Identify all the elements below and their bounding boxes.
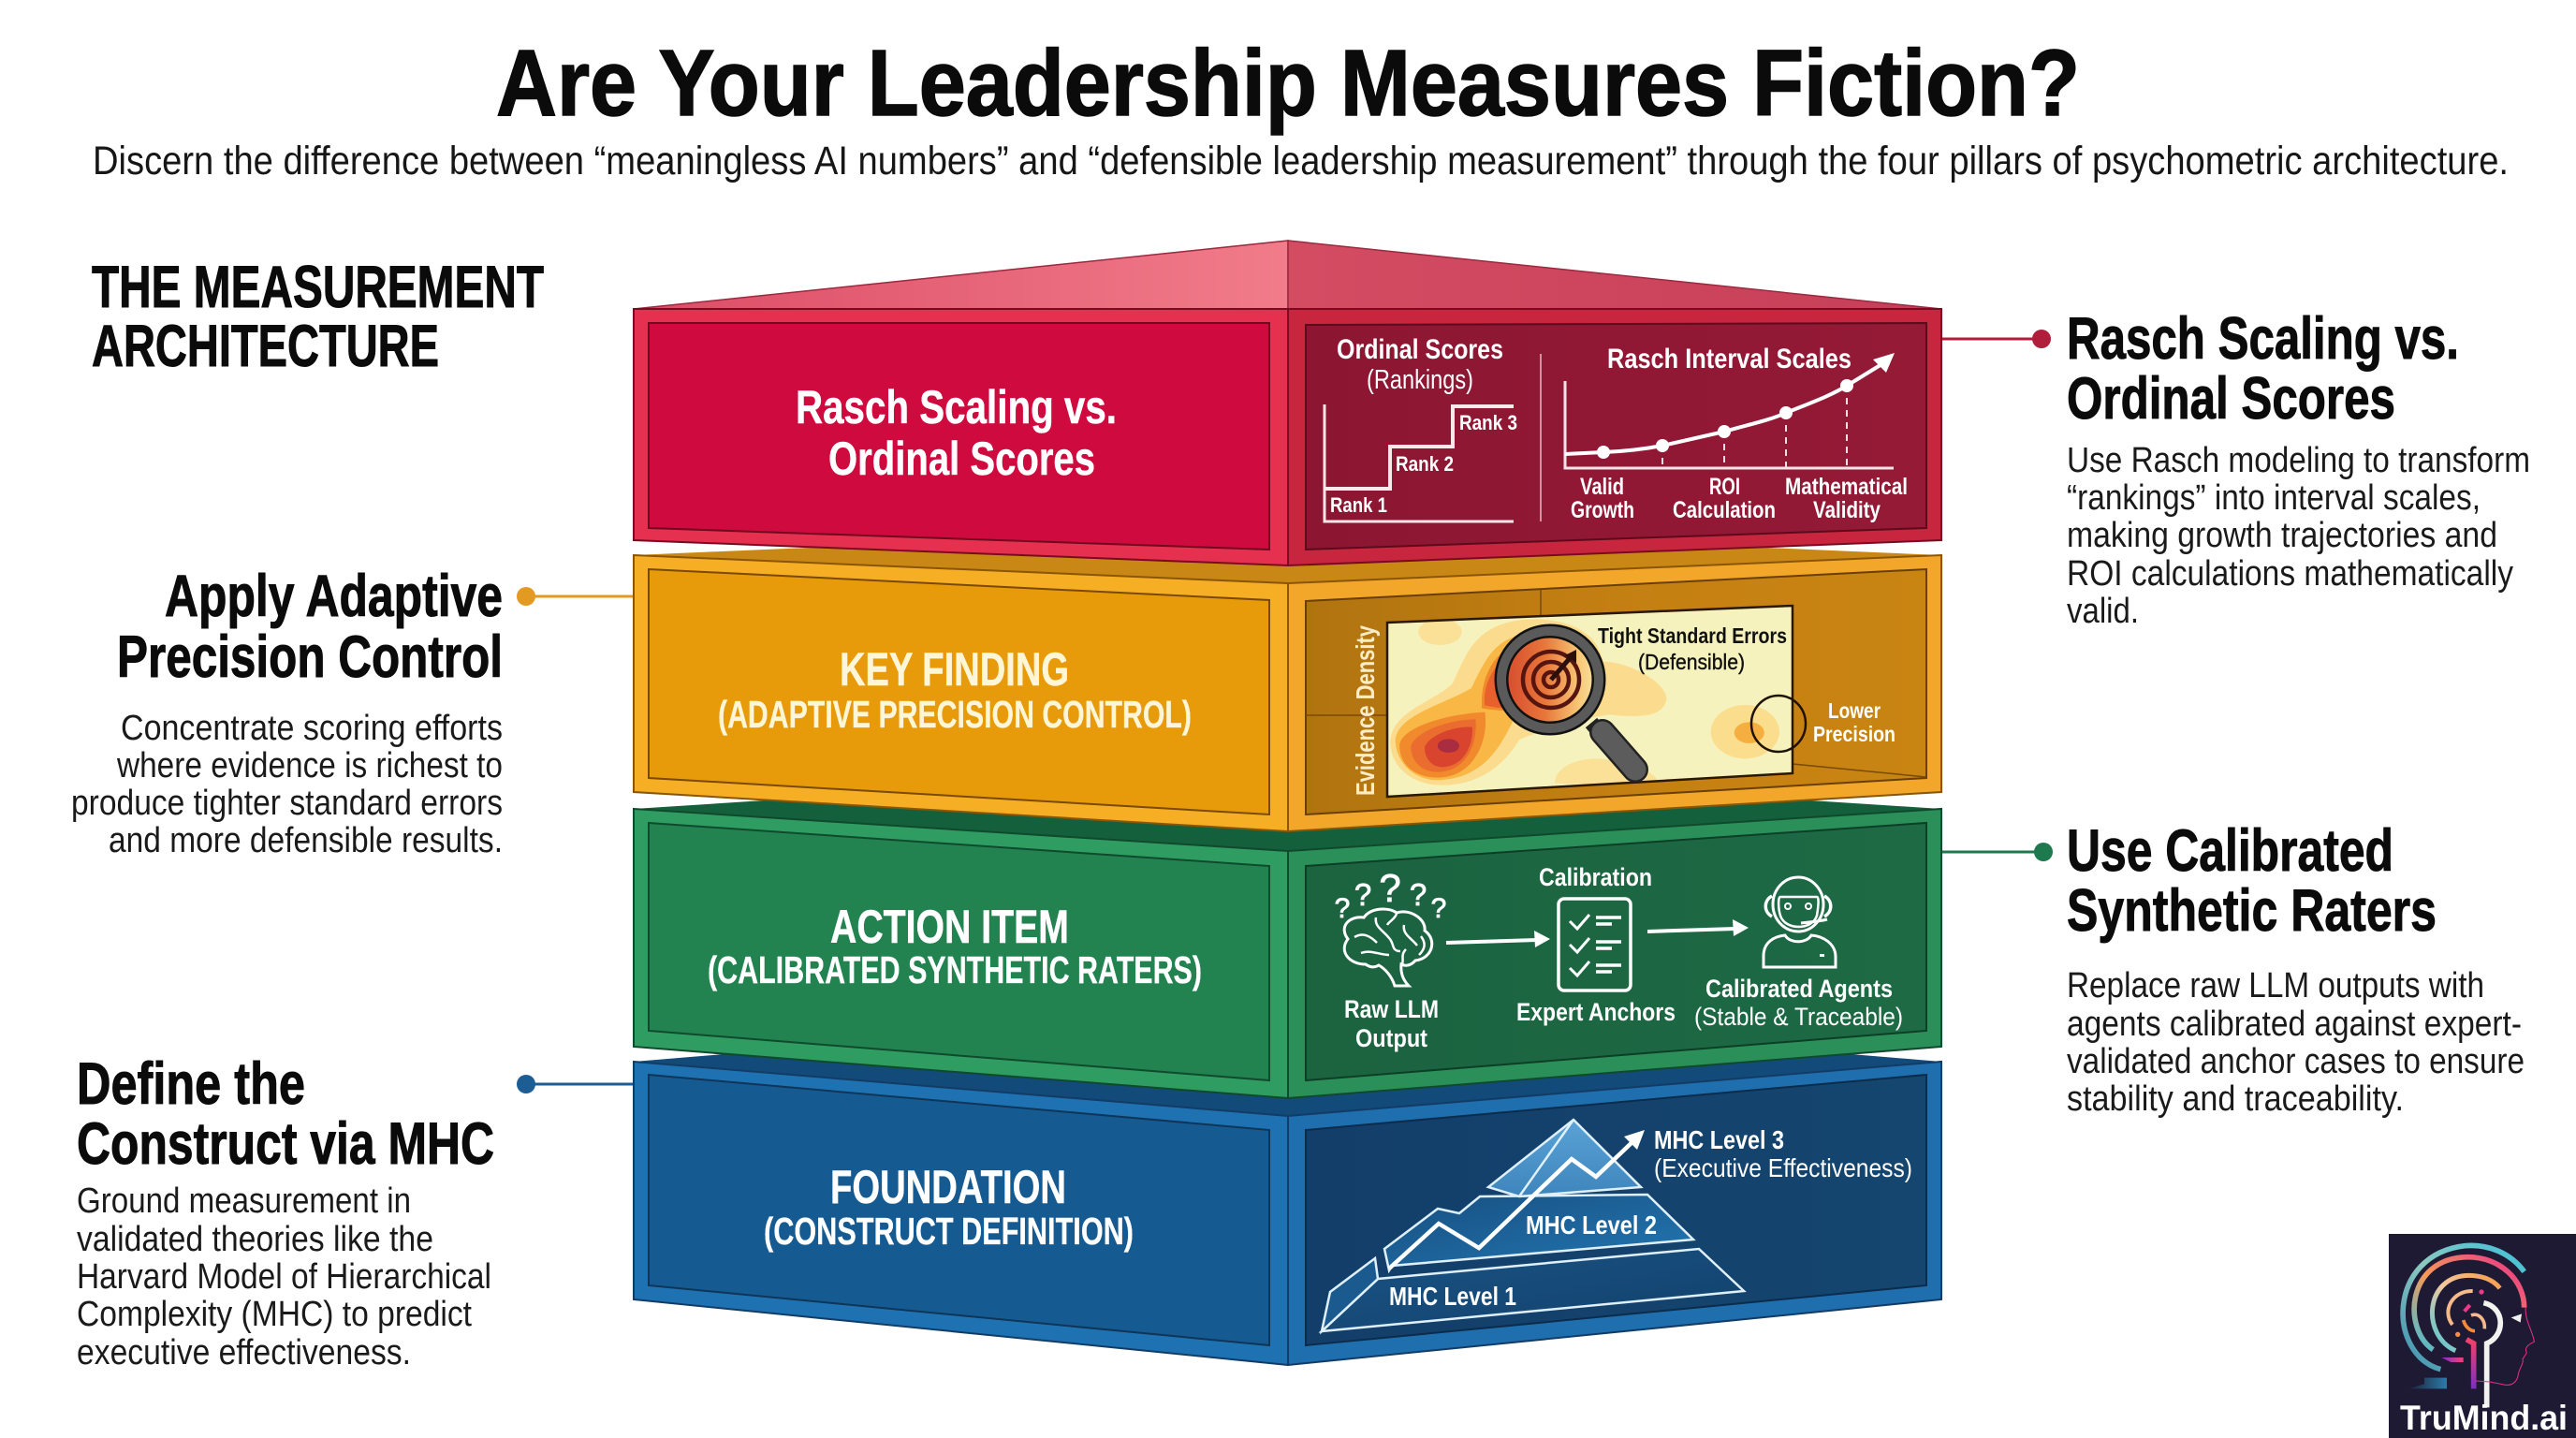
text block: calibrated synthetic raters: stability and traceability.	[2067, 1079, 2404, 1119]
connector: blue callout	[517, 1075, 637, 1093]
section heading: the measurement architecture	[92, 255, 544, 379]
logo: TruMind.ai	[2389, 1234, 2576, 1438]
text block: calibrated synthetic raters: validated anchor cases to ensure	[2067, 1042, 2525, 1081]
connector: orange callout	[517, 587, 637, 606]
arrow: brain to checklist	[1446, 931, 1550, 947]
text block: rasch scaling: valid.	[2067, 592, 2139, 631]
diagram: calibration flow: (Stable & Traceable)	[1694, 1003, 1903, 1031]
label: foundation: FOUNDATION	[830, 1161, 1066, 1213]
icon: brain with question marks: ?	[1379, 866, 1401, 910]
panel: rasch scaling block	[634, 241, 1941, 565]
arrow: growth zigzag	[1389, 1130, 1645, 1269]
text block: adaptive precision control: produce tighter standard errors	[71, 784, 503, 823]
text block: construct via MHC: Harvard Model of Hierarchical	[77, 1257, 491, 1297]
label: foundation	[764, 1161, 1134, 1253]
text block: rasch scaling: Ordinal Scores	[2067, 366, 2395, 432]
connector: red callout	[1938, 330, 2051, 348]
icon: brain with question marks: ?	[1410, 877, 1427, 912]
panel: key finding block: Precision	[1813, 722, 1895, 746]
text block: rasch scaling: ROI calculations mathematically	[2067, 554, 2513, 594]
diagram: calibration flow: Calibrated Agents	[1705, 975, 1893, 1003]
text block: calibrated synthetic raters	[2067, 818, 2525, 1119]
text block: rasch scaling: “rankings” into interval scales,	[2067, 478, 2481, 518]
text block: construct via MHC: Define the	[77, 1051, 305, 1117]
chart: ordinal step scale: Ordinal Scores	[1337, 334, 1503, 365]
text block: construct via MHC: Ground measurement in	[77, 1181, 411, 1221]
arrow: checklist to agent	[1647, 919, 1749, 936]
chart: MHC pyramid: MHC Level 3	[1654, 1125, 1784, 1154]
callout: lower precision circle	[1751, 696, 1806, 752]
text block: calibrated synthetic raters: Synthetic Raters	[2067, 878, 2437, 944]
chart: rasch interval curve: Rasch Interval Scales	[1607, 344, 1852, 374]
section heading: the measurement architecture: THE MEASUREMENT	[92, 255, 544, 320]
text block: construct via MHC: validated theories like the	[77, 1220, 433, 1259]
diagram: calibration flow	[1335, 863, 1903, 1052]
chart: evidence heatmap	[1387, 606, 1806, 797]
icon: brain with question marks: ?	[1431, 893, 1446, 924]
text block: adaptive precision control: and more defensible results.	[109, 821, 503, 860]
icon: calibrated agent	[1764, 877, 1836, 967]
text block: calibrated synthetic raters: agents calibrated against expert-	[2067, 1005, 2522, 1044]
icon: brain with question marks: ?	[1354, 877, 1371, 912]
text block: rasch scaling: Rasch Scaling vs.	[2067, 306, 2459, 372]
text block: calibrated synthetic raters: Replace raw LLM outputs with	[2067, 966, 2484, 1005]
text block: construct via MHC: executive effectiveness.	[77, 1333, 411, 1372]
chart: MHC pyramid	[1322, 1120, 1912, 1331]
label: foundation: (CONSTRUCT DEFINITION)	[764, 1210, 1134, 1253]
text block: construct via MHC: Construct via MHC	[77, 1111, 494, 1177]
chart: evidence heatmap: Tight Standard Errors	[1598, 624, 1787, 648]
diagram: calibration flow: Raw LLM	[1344, 995, 1439, 1023]
label: key finding	[718, 643, 1192, 736]
chart: rasch interval curve	[1565, 344, 1908, 523]
text block: adaptive precision control	[71, 564, 503, 860]
chart: rasch interval curve: Validity	[1813, 497, 1881, 523]
chart: MHC pyramid: MHC Level 1	[1389, 1282, 1516, 1311]
chart: ordinal step scale: Rank 2	[1396, 452, 1454, 476]
icon: brain with question marks	[1335, 866, 1446, 986]
logo: TruMind.ai: TruMind.ai	[2400, 1399, 2568, 1437]
chart: ordinal step scale: Rank 3	[1459, 411, 1517, 434]
chart: ordinal step scale: (Rankings)	[1367, 365, 1473, 395]
text block: construct via MHC	[77, 1051, 494, 1372]
label: rasch scaling	[796, 381, 1117, 485]
text block: rasch scaling: making growth trajectories and	[2067, 516, 2497, 555]
text block: adaptive precision control: where evidence is richest to	[116, 746, 503, 785]
label: action item: (CALIBRATED SYNTHETIC RATERS)	[708, 948, 1202, 991]
text block: adaptive precision control: Concentrate scoring efforts	[121, 709, 503, 748]
chart: MHC pyramid: (Executive Effectiveness)	[1654, 1153, 1912, 1182]
icon: brain with question marks: ?	[1335, 893, 1350, 924]
chart: MHC pyramid: MHC Level 2	[1526, 1211, 1657, 1240]
text block: construct via MHC: Complexity (MHC) to predict	[77, 1295, 472, 1334]
label: action item: ACTION ITEM	[830, 901, 1069, 953]
connector: green callout	[1938, 843, 2053, 861]
chart: ordinal step scale	[1325, 334, 1517, 521]
chart: rasch interval curve: ROI	[1709, 474, 1740, 500]
chart: rasch interval curve: Mathematical	[1785, 474, 1908, 500]
label: rasch scaling: Ordinal Scores	[828, 433, 1095, 485]
label: key finding: KEY FINDING	[840, 643, 1069, 696]
panel: key finding block: Lower	[1828, 698, 1881, 723]
panel: key finding block	[634, 527, 1941, 831]
panel: action item block	[634, 767, 1941, 1098]
label: key finding: (ADAPTIVE PRECISION CONTROL)	[718, 693, 1192, 736]
chart: ordinal step scale: Rank 1	[1330, 493, 1387, 517]
icon: checklist	[1559, 899, 1631, 990]
text block: adaptive precision control: Precision Control	[117, 624, 503, 690]
panel: foundation block	[634, 1007, 1941, 1365]
label: action item	[708, 901, 1202, 991]
diagram: calibration flow: Output	[1355, 1024, 1427, 1052]
chart: rasch interval curve: Valid	[1580, 474, 1624, 500]
text block: rasch scaling	[2067, 306, 2530, 631]
vertical label: evidence density: Evidence Density	[1351, 625, 1380, 796]
diagram: calibration flow: Calibration	[1539, 863, 1652, 891]
section heading: the measurement architecture: ARCHITECTURE	[92, 314, 439, 379]
title: Are Your Leadership Measures Fiction?	[496, 31, 2080, 136]
chart: evidence heatmap: (Defensible)	[1638, 650, 1745, 674]
label: rasch scaling: Rasch Scaling vs.	[796, 381, 1117, 433]
icon: magnifier with target	[1501, 631, 1635, 770]
diagram: calibration flow: Expert Anchors	[1516, 998, 1676, 1026]
text block: calibrated synthetic raters: Use Calibrated	[2067, 818, 2393, 884]
text block: adaptive precision control: Apply Adaptive	[165, 564, 503, 629]
chart: rasch interval curve: Calculation	[1673, 497, 1776, 523]
chart: rasch interval curve: Growth	[1571, 497, 1634, 523]
